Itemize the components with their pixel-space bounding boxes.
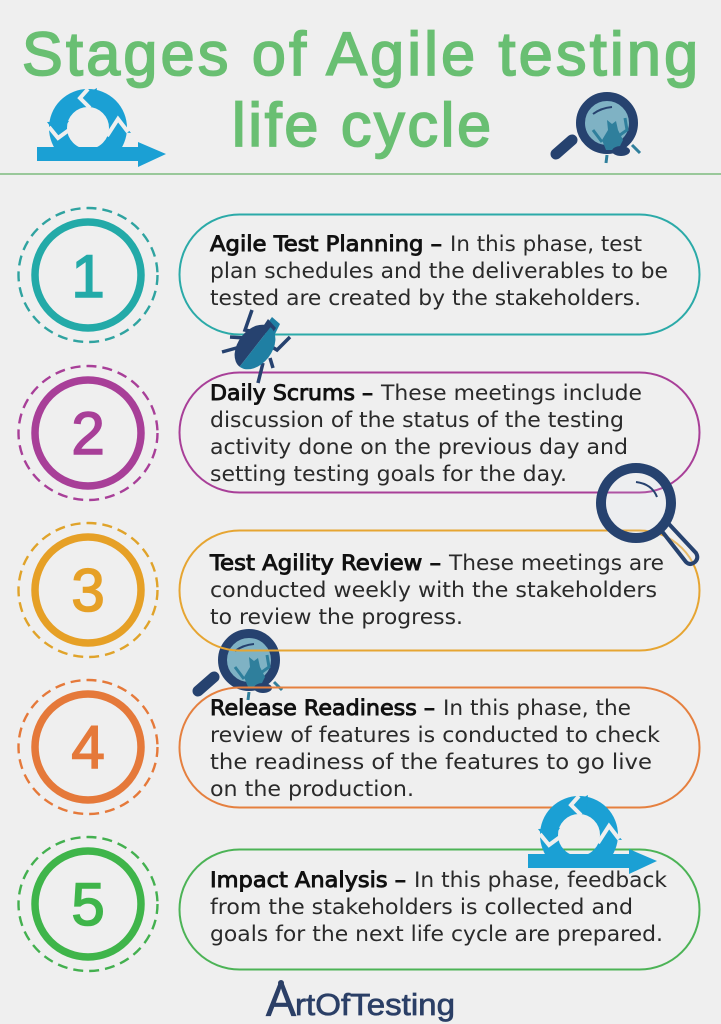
header divider <box>0 173 721 175</box>
step 3 <box>18 523 700 657</box>
title: Stages of Agile testing <box>22 20 698 88</box>
step 3: conducted weekly with the stakeholders <box>210 578 657 602</box>
step 4: the readiness of the features to go live <box>210 750 652 774</box>
step 1: Agile Test Planning – <box>210 232 442 256</box>
icon: bug magnifier, lower <box>198 634 282 700</box>
logo: ArtOfTesting: rtOfTesting <box>295 987 455 1022</box>
step 2 <box>18 366 700 500</box>
step 1: 1 <box>71 243 105 310</box>
step 5 <box>18 837 700 971</box>
step 4: Release Readiness – <box>210 696 435 720</box>
step 5: from the stakeholders is collected and <box>210 895 633 919</box>
step 2: setting testing goals for the day. <box>210 462 567 486</box>
step 1: plan schedules and the deliverables to be <box>210 259 668 283</box>
step 5: In this phase, feedback <box>414 868 668 892</box>
step 1: In this phase, test <box>450 232 642 256</box>
step 5: Impact Analysis – <box>210 868 406 892</box>
icon: agile cycle, lower <box>528 795 657 874</box>
title: life cycle <box>232 91 491 159</box>
step 5: 5 <box>71 871 105 938</box>
title <box>22 20 698 159</box>
step 4 <box>18 680 700 814</box>
step 2: discussion of the status of the testing <box>210 408 624 432</box>
icon: large magnifier <box>601 468 697 564</box>
step 1: tested are created by the stakeholders. <box>210 286 641 310</box>
logo: ArtOfTesting <box>266 974 455 1024</box>
step 4: review of features is conducted to check <box>210 723 661 747</box>
step 2: Daily Scrums – <box>210 381 373 405</box>
icon: beetle <box>222 310 290 383</box>
step 2: activity done on the previous day and <box>210 435 628 459</box>
step 2: 2 <box>71 400 105 467</box>
step 4: on the production. <box>210 777 414 801</box>
step 1 <box>18 208 700 342</box>
step 3: These meetings are <box>448 551 664 575</box>
step 3: 3 <box>71 557 105 624</box>
step 4: 4 <box>71 714 105 781</box>
step 3: to review the progress. <box>210 605 463 629</box>
icon: bug magnifier, header <box>556 96 640 163</box>
step 3: Test Agility Review – <box>209 551 441 575</box>
step 5: goals for the next life cycle are prepared. <box>210 922 663 946</box>
icon: agile cycle, header <box>37 88 166 167</box>
step 2: These meetings include <box>380 381 642 405</box>
step 4: In this phase, the <box>443 696 631 720</box>
